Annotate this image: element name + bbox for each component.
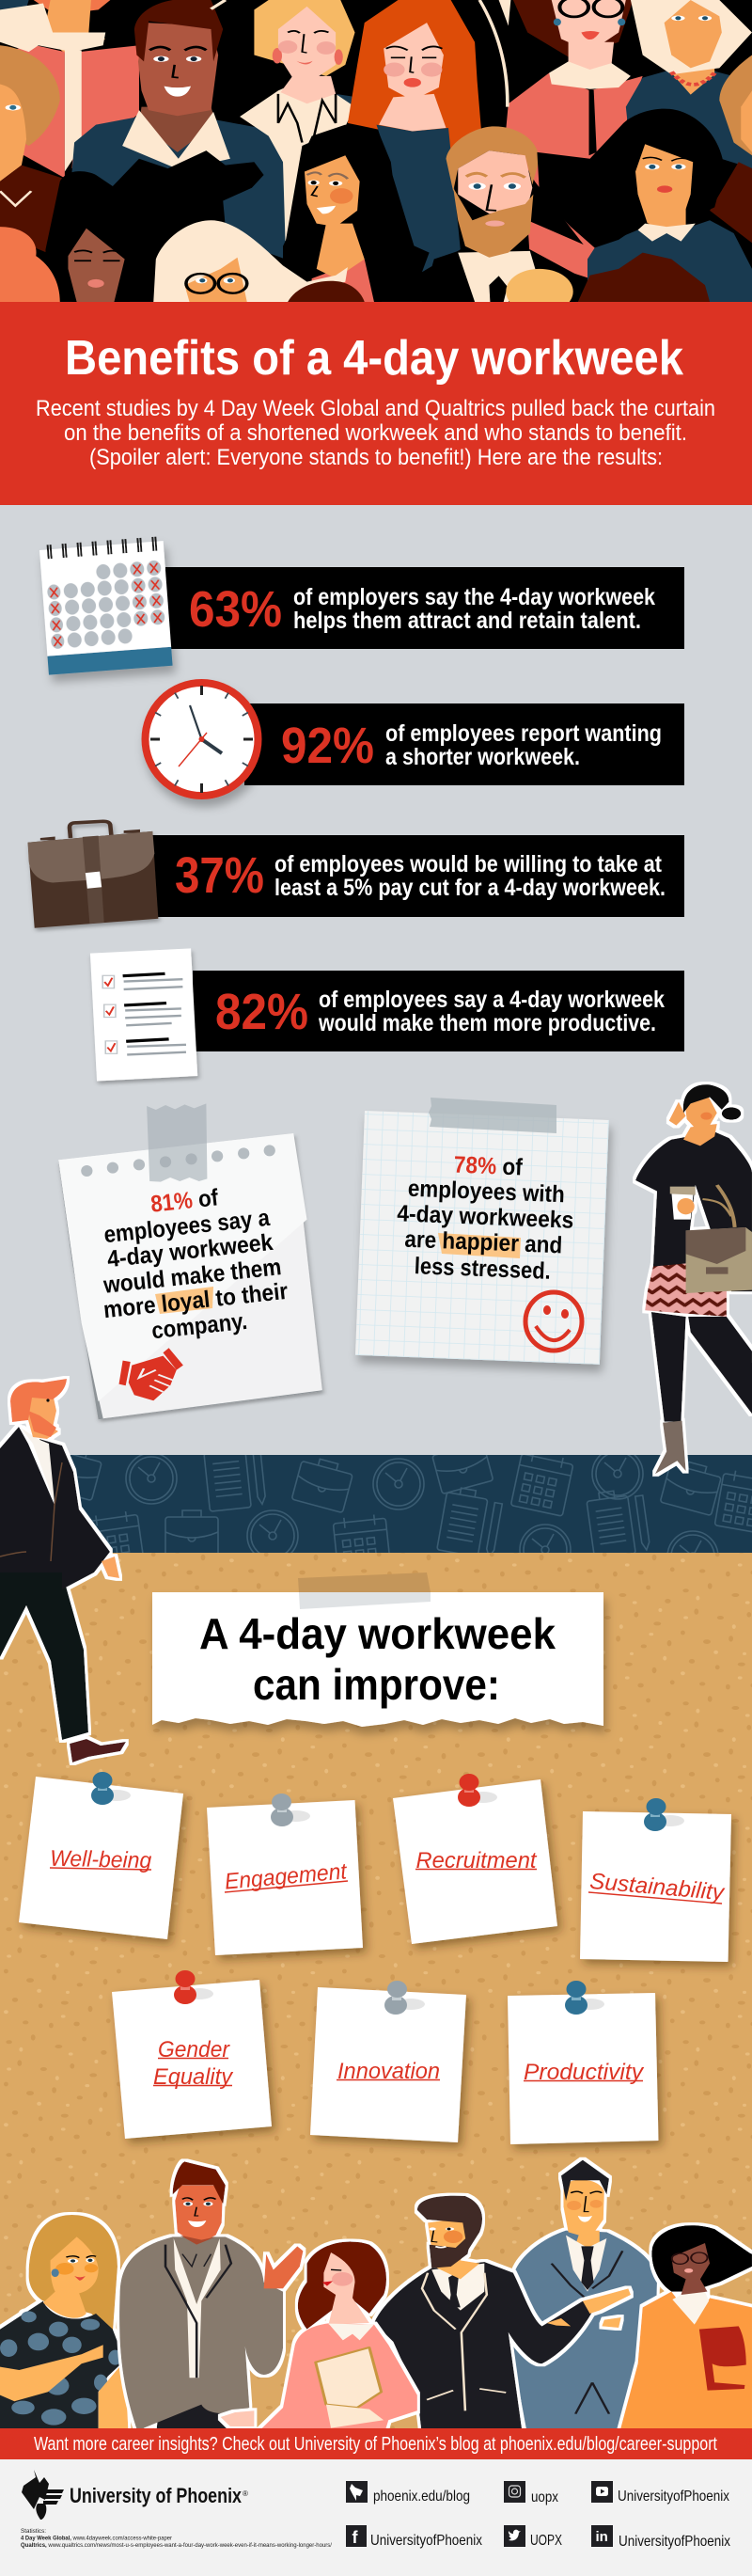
note text: employees with bbox=[407, 1176, 565, 1208]
social: linkedin bbox=[591, 2525, 730, 2550]
stat: 37% of employees bbox=[28, 821, 684, 928]
person: woman in pink with folder bbox=[221, 2241, 417, 2436]
percent: 63% bbox=[189, 581, 282, 638]
statistics sources: Qualtrics, www.qualtrics.com/news/most-u-s-employees-want-a-four-day-work-week-even-if-it-means-working-longer-hours/ bbox=[21, 2543, 332, 2549]
note text: company. bbox=[150, 1308, 248, 1344]
group of six colleagues bbox=[0, 2160, 752, 2436]
call to action bar bbox=[0, 2428, 752, 2459]
note text: 4-day workweek bbox=[106, 1229, 274, 1272]
woman on phone bbox=[635, 1084, 752, 1474]
pin bbox=[565, 1981, 604, 2015]
paper bbox=[355, 1111, 609, 1365]
pink jacket lower part bbox=[527, 220, 595, 278]
pin bbox=[91, 1772, 131, 1805]
trousers bbox=[0, 1572, 88, 1740]
statement bbox=[385, 720, 662, 770]
note: Gender Equality bbox=[112, 1970, 272, 2139]
note text: are happier and bbox=[404, 1226, 563, 1258]
stat: 82% of employees bbox=[90, 948, 684, 1082]
stat: 63% of employers bbox=[39, 536, 684, 675]
note text: 4-day workweeks bbox=[397, 1200, 574, 1234]
social: instagram: uopx bbox=[531, 2489, 558, 2505]
note: Well-being: Well-being bbox=[50, 1846, 152, 1873]
intro text: (Spoiler alert: Everyone stands to benefit!) Here are the results: bbox=[89, 445, 663, 470]
person: man in grey jacket bbox=[119, 2161, 303, 2436]
pin bbox=[458, 1774, 497, 1807]
person: orange jacket woman bbox=[619, 2225, 752, 2436]
blonde woman bbox=[254, 0, 355, 76]
shoe bbox=[70, 1739, 126, 1762]
pin bbox=[644, 1798, 684, 1831]
black hair of lower-left woman bbox=[45, 150, 263, 260]
person: blue suit man bbox=[509, 2160, 657, 2436]
statement: of employees report wanting bbox=[385, 720, 662, 747]
social: twitter: UOPX bbox=[530, 2533, 562, 2549]
statement: helps them attract and retain talent. bbox=[293, 608, 641, 634]
hero illustration: crowd of people bbox=[0, 0, 752, 314]
note: Productivity: Productivity bbox=[524, 2060, 645, 2085]
social: linkedin: UniversityofPhoenix bbox=[619, 2534, 730, 2550]
social: facebook: f bbox=[352, 2528, 359, 2547]
social: blog: phoenix.edu/blog bbox=[373, 2489, 470, 2505]
icon: calendar bbox=[39, 536, 173, 675]
statistics sources: Statistics: bbox=[21, 2529, 46, 2535]
note text: 78% of bbox=[453, 1152, 524, 1180]
pin bbox=[384, 1981, 425, 2015]
note: Gender Equality: Equality bbox=[153, 2064, 234, 2090]
pin bbox=[174, 1970, 213, 2004]
social: facebook bbox=[346, 2525, 482, 2549]
note: Innovation bbox=[310, 1981, 466, 2142]
stat: 92% of employees bbox=[145, 683, 684, 796]
social: youtube bbox=[591, 2481, 729, 2505]
man walking bbox=[0, 1379, 126, 1762]
icon: briefcase bbox=[28, 821, 158, 928]
right edge figure bbox=[719, 55, 752, 155]
bearded man with tie bbox=[432, 126, 575, 302]
black-haired woman right bbox=[537, 109, 752, 302]
icon: clock bbox=[145, 683, 258, 796]
note: Gender Equality: Gender bbox=[158, 2037, 230, 2062]
heading note: A 4-day workweek can improve bbox=[152, 1572, 603, 1727]
title: Benefits of a 4-day workweek bbox=[65, 331, 683, 386]
icon: checklist bbox=[90, 948, 197, 1082]
note: Well-being bbox=[19, 1772, 183, 1939]
footer panel bbox=[0, 2459, 752, 2576]
paper bbox=[58, 1103, 322, 1419]
tape bbox=[429, 1098, 556, 1133]
note: Recruitment bbox=[393, 1774, 557, 1944]
intro text: on the benefits of a shortened workweek and who stands to benefit. bbox=[64, 420, 687, 446]
note text: would make them bbox=[102, 1254, 283, 1299]
statement: of employees say a 4-day workweek bbox=[319, 987, 665, 1013]
person: bearded man in black suit bbox=[374, 2196, 631, 2436]
highlight: happier bbox=[438, 1233, 521, 1258]
tape bbox=[298, 1572, 431, 1592]
social: twitter bbox=[504, 2525, 562, 2549]
social: facebook: UniversityofPhoenix bbox=[370, 2533, 482, 2549]
statement bbox=[293, 584, 655, 634]
note: Innovation: Innovation bbox=[337, 2059, 440, 2084]
statement bbox=[274, 851, 666, 901]
top-right white-haired woman bbox=[626, 70, 752, 168]
note: Recruitment: Recruitment bbox=[415, 1848, 538, 1873]
statistics sources bbox=[21, 2529, 332, 2549]
logo: University of Phoenix bbox=[22, 2470, 248, 2520]
icon: handshake bbox=[119, 1348, 183, 1400]
heading text bbox=[199, 1609, 556, 1709]
note: Productivity bbox=[508, 1981, 658, 2144]
heading text: A 4-day workweek bbox=[199, 1609, 556, 1658]
note: 78% happier bbox=[355, 1098, 609, 1365]
statement bbox=[318, 987, 665, 1036]
statement: a shorter workweek. bbox=[385, 744, 580, 770]
statistics sources: 4 Day Week Global, www.4dayweek.com/access-white-paper bbox=[21, 2536, 172, 2542]
pin bbox=[271, 1794, 310, 1826]
center black-haired woman bbox=[283, 125, 430, 302]
white-haired woman with glasses bbox=[153, 220, 365, 302]
statement: of employees would be willing to take at bbox=[274, 851, 663, 877]
note text: less stressed. bbox=[414, 1253, 551, 1285]
note text bbox=[102, 1184, 290, 1344]
icon: smiley bbox=[525, 1292, 582, 1351]
note: Sustainability bbox=[580, 1798, 731, 1962]
statement: least a 5% pay cut for a 4-day workweek. bbox=[274, 875, 666, 901]
note text: 81% of bbox=[149, 1184, 220, 1218]
top-right woman with glasses bbox=[513, 0, 633, 58]
note: 81% loyal bbox=[58, 1103, 322, 1419]
note: Sustainability: Sustainability bbox=[588, 1869, 727, 1905]
percent: 82% bbox=[215, 984, 308, 1040]
header panel bbox=[0, 302, 752, 505]
percent: 37% bbox=[175, 847, 264, 904]
intro text bbox=[36, 396, 715, 470]
red-haired woman bbox=[348, 0, 482, 155]
statement: of employers say the 4-day workweek bbox=[293, 584, 655, 610]
jacket bbox=[0, 1427, 110, 1589]
person: blonde woman in dotted dress bbox=[0, 2215, 129, 2436]
social: youtube: UniversityofPhoenix bbox=[618, 2489, 729, 2505]
cork board background bbox=[0, 1553, 752, 2428]
social: blog bbox=[346, 2481, 470, 2505]
social: instagram bbox=[504, 2481, 558, 2505]
heading text: can improve: bbox=[253, 1660, 500, 1709]
note: Engagement bbox=[207, 1794, 363, 1955]
note text bbox=[397, 1152, 574, 1285]
note: Engagement: Engagement bbox=[224, 1858, 349, 1895]
bearded dark man in hero bbox=[72, 0, 286, 260]
social: linkedin: in bbox=[596, 2529, 608, 2545]
highlight: loyal bbox=[155, 1287, 213, 1314]
note text: employees say a bbox=[102, 1205, 272, 1248]
percent: 92% bbox=[281, 718, 374, 774]
logo: University of Phoenix: University of Phoenix bbox=[70, 2484, 243, 2507]
statement: would make them more productive. bbox=[318, 1010, 656, 1036]
tape bbox=[147, 1103, 207, 1182]
note text: more loyal to their bbox=[102, 1278, 290, 1323]
logo: University of Phoenix: ® bbox=[243, 2489, 248, 2498]
navy band with office icon pattern bbox=[70, 1455, 752, 1553]
